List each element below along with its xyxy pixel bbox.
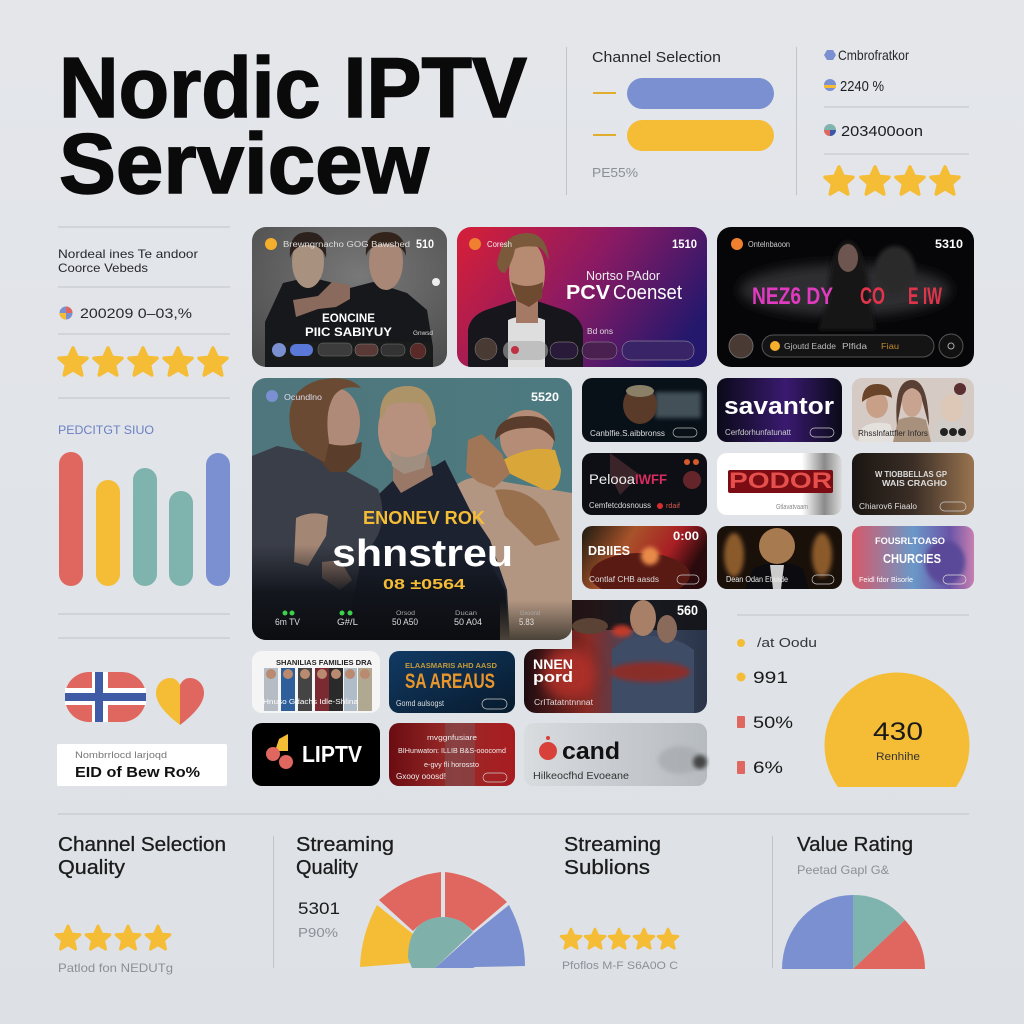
card headline: Bd ons bbox=[587, 327, 613, 336]
thumbnail: red curtain: mvggnfusiare bbox=[427, 735, 477, 742]
stat: 991: 991 bbox=[753, 668, 788, 687]
card header bbox=[266, 390, 558, 402]
neon headline: CO bbox=[860, 283, 885, 310]
card: crowd poster: 560 bbox=[677, 602, 698, 618]
thumbnail: man in suit: Dean Odan Etaade bbox=[726, 575, 788, 584]
card: featured show bbox=[252, 378, 572, 640]
card: crowd poster: pord bbox=[533, 669, 573, 686]
featured headline bbox=[334, 511, 510, 589]
card: crimson presenter bbox=[457, 227, 707, 367]
player bar: Plfida bbox=[842, 342, 868, 351]
stat: heading bbox=[737, 635, 817, 650]
stat strip: 6m TV bbox=[275, 617, 300, 627]
stat: 50%: 50% bbox=[753, 713, 793, 732]
stat strip: G#/L bbox=[337, 617, 358, 627]
thumbnail: sepia: W TIOBBELLAS GP bbox=[875, 470, 948, 479]
text block: source: Coorce Vebeds bbox=[58, 261, 148, 275]
thumbnail: red curtain: BIHunwaton: ILLIB B&S-ooocomd bbox=[398, 748, 506, 755]
stat: date range: 200209 0–03,% bbox=[80, 305, 192, 321]
metric title: Sublions bbox=[564, 857, 650, 879]
star rating: five stars bbox=[59, 348, 227, 375]
thumbnail: sepia: Chiarov6 Fiaalo bbox=[859, 502, 918, 511]
metric note: Peetad Gapl G& bbox=[797, 863, 889, 877]
thumbnail: sa areads bbox=[389, 651, 515, 713]
bottom fade bbox=[252, 545, 510, 640]
thumbnail: cast lineup: SHANILIAS FAMILIES DRA bbox=[276, 660, 372, 667]
metric title bbox=[296, 834, 394, 879]
thumbnail: pastel churches bbox=[852, 526, 974, 589]
bar chart bbox=[58, 423, 230, 586]
stat strip: 5.83 bbox=[519, 617, 534, 627]
featured headline: shnstreu bbox=[332, 533, 513, 575]
card header: Ontelnbaoon bbox=[748, 240, 790, 249]
card header bbox=[731, 238, 962, 250]
card text: PIIC SABIYUY bbox=[305, 325, 392, 339]
control chips bbox=[272, 342, 433, 360]
thumbnail: cand: Hilkeocfhd Evoeane bbox=[533, 771, 629, 782]
neon headline: E IW bbox=[908, 283, 942, 310]
player bar bbox=[729, 334, 963, 358]
metric: value rating bbox=[782, 834, 925, 969]
card headline: Coenset bbox=[613, 282, 682, 304]
icon: heart bbox=[156, 678, 204, 725]
label: percent: PE55% bbox=[592, 165, 638, 180]
thumbnail: red curtain: Gxooy ooosd! bbox=[396, 772, 446, 781]
figure: smoky shadow bbox=[740, 240, 950, 330]
title bbox=[59, 41, 527, 212]
stat strip: Orsod bbox=[396, 611, 415, 617]
thumbnail: red planet: DBIIES bbox=[588, 543, 630, 558]
bar: yellow bbox=[593, 120, 774, 151]
stat strip: Ducan bbox=[455, 611, 477, 617]
metric title: Quality bbox=[296, 857, 358, 879]
card headline: Nortso PAdor bbox=[586, 268, 661, 283]
stat row: percentage bbox=[824, 78, 884, 95]
thumbnail: red planet: 0:00 bbox=[673, 529, 699, 543]
card header: Brewngrnacho GOG Bawshed bbox=[283, 240, 410, 249]
thumbnail: red planet bbox=[582, 526, 707, 589]
thumbnail: pink type: Pelooa bbox=[589, 471, 635, 487]
logo tile: LIPTV: LIPTV bbox=[302, 741, 363, 767]
control chips bbox=[475, 338, 694, 360]
metric: streaming sublions bbox=[561, 834, 678, 972]
card header: Ocundlno bbox=[284, 393, 323, 402]
metric title bbox=[58, 834, 226, 879]
neon headline: NEZ6 DY bbox=[752, 283, 833, 310]
card headline: PCV bbox=[566, 282, 611, 304]
card header bbox=[265, 237, 440, 337]
metric title: Streaming bbox=[564, 834, 661, 856]
chart: yellow dome: 430 bbox=[873, 718, 923, 746]
thumbnail: pink type: rdaif bbox=[666, 503, 680, 510]
card text bbox=[306, 314, 392, 336]
neon headline bbox=[753, 287, 942, 304]
chart: yellow dome: Renhihe bbox=[876, 751, 920, 763]
thumbnail: savantor: savantor bbox=[724, 393, 834, 420]
thumbnail: pink type bbox=[582, 453, 707, 515]
panel: contributor stats bbox=[796, 47, 969, 195]
title: Nordic IPTV bbox=[59, 41, 527, 136]
text block: source: Nordeal ines Te andoor bbox=[58, 247, 198, 261]
thumbnail: three women bbox=[852, 378, 974, 442]
label box: Nombrrlocd larjoqd bbox=[75, 750, 167, 760]
thumbnail: red 3D type bbox=[717, 453, 842, 515]
star rating: four stars bbox=[825, 167, 959, 194]
star rating bbox=[56, 926, 170, 949]
featured headline: ENONEV ROK bbox=[363, 508, 485, 528]
metric value: 5301 bbox=[298, 899, 340, 918]
thumbnail: cand bbox=[524, 723, 707, 786]
thumbnail: pastel churches: CHURCIES bbox=[883, 551, 941, 566]
featured headline: 08 ±0564 bbox=[383, 576, 466, 593]
thumbnail: savantor bbox=[717, 378, 842, 442]
stat row: contributor: Cmbrofratkor bbox=[838, 47, 909, 63]
stat: 6%: 6% bbox=[753, 758, 783, 777]
card: crowd poster: NNEN bbox=[533, 656, 573, 672]
metric title: Quality bbox=[58, 857, 125, 879]
metric title bbox=[564, 834, 661, 879]
bottom right shade bbox=[500, 600, 572, 640]
thumbnail: red planet: Contlaf CHB aasds bbox=[589, 575, 659, 584]
thumbnail: sepia bbox=[852, 453, 974, 515]
metric value bbox=[298, 899, 340, 940]
metric: streaming quality bbox=[296, 834, 525, 968]
chart label: PEDCITGT SIUO bbox=[58, 423, 154, 437]
player bar: Gjoutd Eadde bbox=[784, 342, 837, 351]
thumbnail: man in suit bbox=[717, 526, 842, 589]
label box bbox=[57, 744, 227, 786]
chart: yellow dome bbox=[824, 672, 970, 787]
thumbnail: cast lineup: Hnuso Gdachs Idle-Shlina bbox=[263, 699, 358, 706]
card header bbox=[469, 238, 697, 250]
stat strip bbox=[275, 610, 540, 625]
heading: channel selection: Channel Selection bbox=[592, 49, 721, 66]
thumbnail: cast lineup bbox=[252, 651, 380, 713]
card header: 1510 bbox=[672, 237, 697, 251]
stat strip: 50 A04 bbox=[454, 617, 482, 627]
thumbnail: forest figure bbox=[582, 378, 707, 442]
card header: 5310 bbox=[935, 237, 963, 251]
panel: channel selection bars bbox=[566, 47, 774, 195]
icon: Norwegian flag bbox=[65, 672, 146, 722]
logo tile: LIPTV bbox=[252, 723, 380, 786]
thumbnail: savantor: Cerfdorhunfatunatt bbox=[725, 428, 792, 437]
card: crowd poster bbox=[524, 600, 707, 713]
card: crowd poster: CrITatatntnnnat bbox=[534, 698, 594, 707]
text block: source bbox=[58, 247, 198, 275]
card headline bbox=[566, 268, 682, 336]
metric note: Patlod fon NEDUTg bbox=[58, 961, 173, 975]
thumbnail: sepia: WAIS CRAGHO bbox=[882, 479, 947, 488]
pie chart bbox=[782, 895, 925, 969]
figure: presenter bbox=[468, 233, 583, 367]
stat: heading: /at Oodu bbox=[757, 635, 817, 650]
card: gray duo show bbox=[252, 227, 447, 367]
player bar: Fiau bbox=[881, 342, 899, 351]
thumbnail: sa areads: SA AREAUS bbox=[405, 670, 495, 693]
card: dark neon bbox=[717, 227, 974, 367]
thumbnail: pastel churches: FOUSRLTOASO bbox=[875, 536, 945, 546]
star rating bbox=[561, 929, 678, 948]
metric title: Channel Selection bbox=[58, 834, 226, 856]
card header: 5520 bbox=[531, 390, 559, 404]
card text: EONCINE bbox=[322, 311, 375, 325]
thumbnail: pink type: Cemfetcdosnouss bbox=[589, 501, 651, 510]
figure: person with yellow mask bbox=[453, 410, 572, 640]
thumbnail: red 3D type: PODOR bbox=[729, 468, 832, 493]
label box: EID of Bew Ro% bbox=[75, 764, 200, 781]
metric title: Value Rating bbox=[797, 834, 913, 856]
thumbnail: red curtain: e-gvy fli horossto bbox=[424, 762, 479, 769]
card header: Gnwsd bbox=[413, 331, 433, 337]
thumbnail: pink type: IWFF bbox=[635, 471, 667, 487]
gauge chart bbox=[360, 872, 525, 968]
bar: blue bbox=[593, 78, 774, 109]
metric note: Pfoflos M-F S6A0O C bbox=[562, 960, 678, 972]
stat: 6% bbox=[737, 758, 783, 777]
thumbnail: red curtain bbox=[389, 723, 515, 786]
panel: left summary bbox=[58, 227, 230, 398]
stat strip: 50 A50 bbox=[392, 617, 418, 627]
stat row: percentage: 2240 % bbox=[840, 78, 884, 95]
card header: Coresh bbox=[487, 240, 512, 249]
metric value: P90% bbox=[298, 925, 338, 940]
thumbnail: sa areads: Gomd aulsogst bbox=[396, 699, 445, 708]
thumbnail: three women: Rhsslnfattfler Infors bbox=[858, 429, 928, 438]
stat row: amount: 203400oon bbox=[841, 123, 923, 140]
stat: 991 bbox=[736, 668, 788, 687]
metric title: Streaming bbox=[296, 834, 394, 856]
stat: 50% bbox=[737, 713, 793, 732]
panel: right stats bbox=[736, 614, 970, 787]
thumbnail: sa areads: ELAASMARIS AHD AASD bbox=[405, 663, 497, 670]
figures: two men bbox=[265, 232, 433, 367]
metric: channel selection quality bbox=[56, 834, 226, 975]
thumbnail: pastel churches: Feidl fdor Bisorle bbox=[859, 577, 913, 584]
stat strip: Gxoond bbox=[520, 611, 540, 617]
title: Servicew bbox=[59, 117, 430, 212]
figure: bearded man bbox=[252, 378, 382, 640]
thumbnail: red 3D type: Gtlavatvaam bbox=[776, 504, 808, 511]
card header: 510 bbox=[416, 237, 434, 251]
figure: blond man bbox=[355, 386, 510, 634]
thumbnail: forest figure: Canblfie.S.aibbronss bbox=[590, 429, 665, 438]
thumbnail: cand: cand bbox=[562, 738, 620, 765]
